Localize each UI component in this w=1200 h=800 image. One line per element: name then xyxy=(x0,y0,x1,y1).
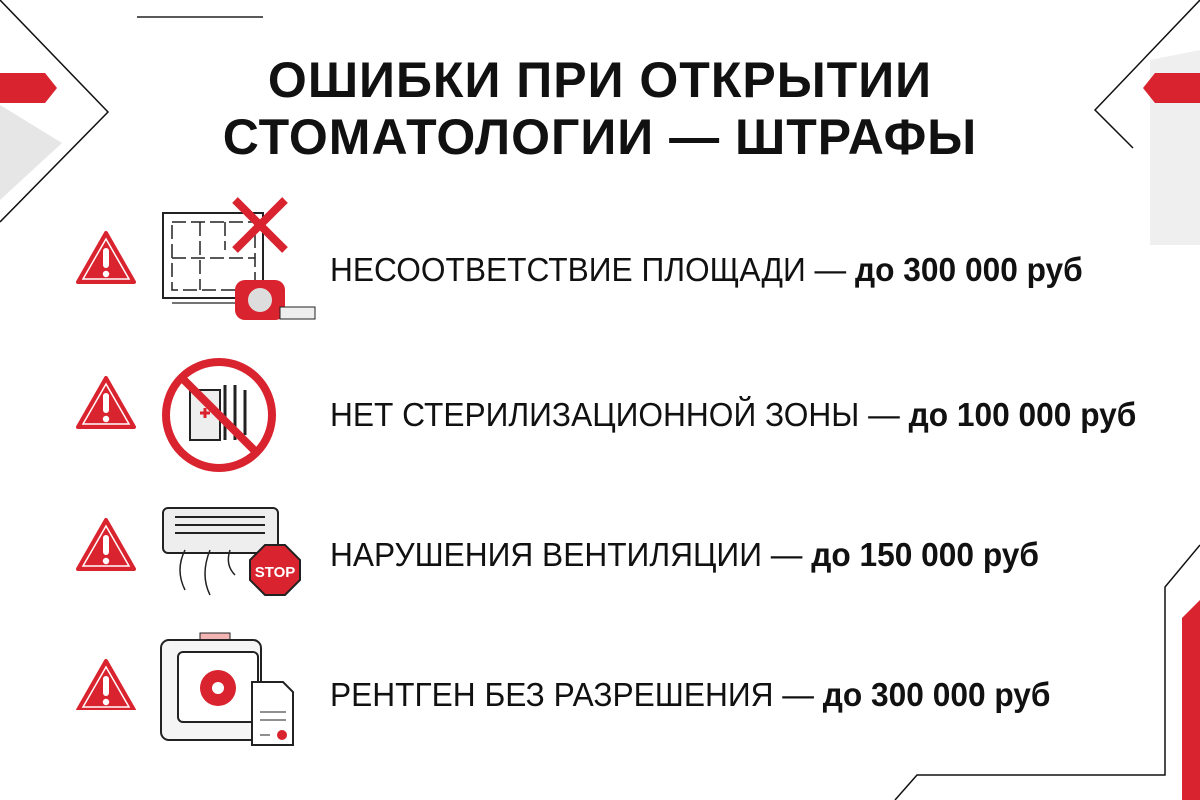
warning icons xyxy=(76,230,136,710)
icon: x-ray xyxy=(160,632,294,746)
icon: no sterilization xyxy=(162,358,276,472)
text: row 4: РЕНТГЕН БЕЗ РАЗРЕШЕНИЯ — до 300 000 руб xyxy=(330,676,1050,713)
text: row 2: НЕТ СТЕРИЛИЗАЦИОННОЙ ЗОНЫ — до 100 000 руб xyxy=(330,396,1136,433)
text: row 3: НАРУШЕНИЯ ВЕНТИЛЯЦИИ — до 150 000 руб xyxy=(330,536,1039,573)
title: ОШИБКИ ПРИ ОТКРЫТИИ xyxy=(268,52,932,108)
text: row 1: НЕСООТВЕТСТВИЕ ПЛОЩАДИ — до 300 000 руб xyxy=(330,251,1083,288)
title: СТОМАТОЛОГИИ — ШТРАФЫ xyxy=(223,109,977,165)
title xyxy=(223,52,977,165)
icon: ventilation stop xyxy=(162,507,301,596)
icon: floor plan xyxy=(162,197,316,320)
icon: ventilation stop: STOP xyxy=(255,564,295,581)
